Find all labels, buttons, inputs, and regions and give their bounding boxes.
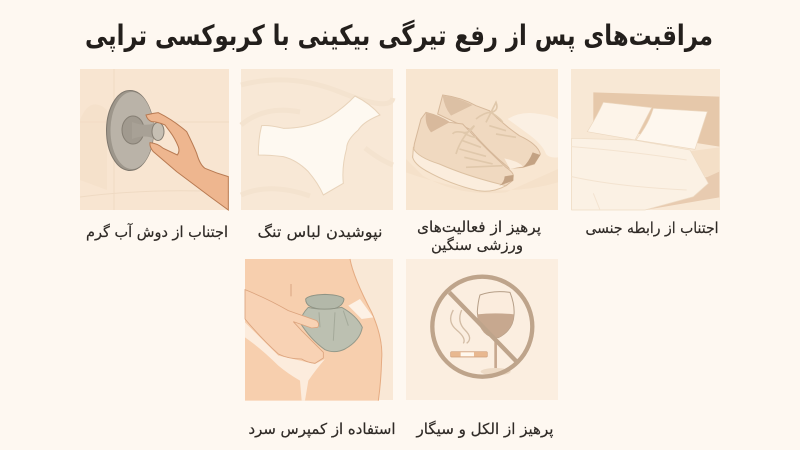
label: heavy sports: ورزشی سنگین xyxy=(431,236,523,254)
icon: front shoe xyxy=(413,112,513,191)
icon: back shoe xyxy=(438,95,540,168)
icon: bed frame xyxy=(633,170,719,210)
label: heavy sports xyxy=(417,218,541,254)
label: intercourse: اجتناب از رابطه جنسی xyxy=(586,219,718,237)
icon: smoke xyxy=(451,310,470,343)
icon: wine glass xyxy=(477,292,514,375)
panel: sports shoes xyxy=(406,69,558,210)
icon: body xyxy=(245,259,382,401)
icon: underwear xyxy=(258,96,380,195)
panel: cold compress xyxy=(245,259,393,401)
icon: shower dial xyxy=(106,90,164,170)
icon: towel xyxy=(508,113,558,158)
label: cold compress: استفاده از کمپرس سرد xyxy=(248,420,396,439)
panel: alcohol and smoking xyxy=(406,259,558,400)
icon: prohibition sign xyxy=(432,277,532,377)
icon: pillows xyxy=(587,102,652,140)
icon: cigarette xyxy=(451,352,487,357)
icon: hand xyxy=(146,113,228,210)
label: alcohol and cigarettes: پرهیز از الکل و سیگار xyxy=(415,420,554,439)
label: tight clothing: نپوشیدن لباس تنگ xyxy=(258,223,382,242)
panel: avoid hot shower xyxy=(80,69,229,210)
icon: ice bag xyxy=(300,294,362,352)
icon: blanket xyxy=(572,138,708,210)
panel: tight clothing xyxy=(241,69,393,210)
shoe artwork in crop coordinates xyxy=(406,95,558,193)
icon: hand xyxy=(245,290,323,363)
icon: headboard xyxy=(593,92,719,147)
panel: intercourse bed xyxy=(571,69,720,210)
label: heavy sports: پرهیز از فعالیت‌های xyxy=(417,218,541,237)
label: hot shower: اجتناب از دوش آب گرم xyxy=(86,223,228,241)
icon: underwear band xyxy=(245,322,325,401)
